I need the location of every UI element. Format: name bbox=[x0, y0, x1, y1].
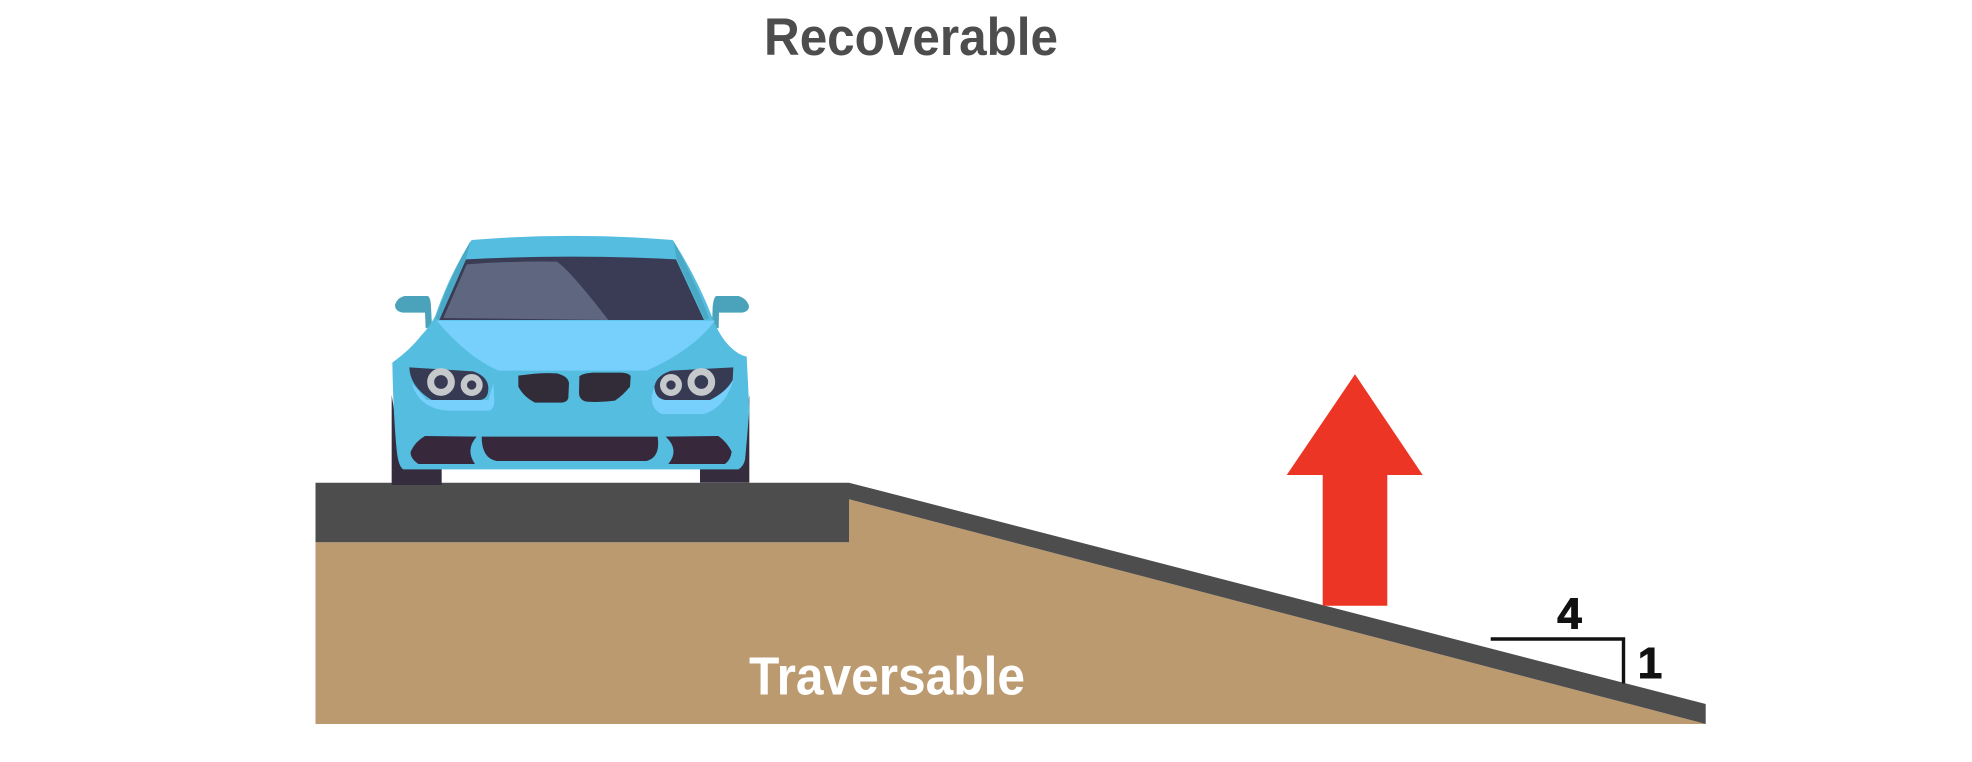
left headlight glow bbox=[412, 383, 494, 411]
heading: Recoverable: Recoverable bbox=[764, 8, 1058, 67]
right headlight glow bbox=[652, 380, 733, 414]
right wheel bbox=[700, 395, 749, 483]
left windshield pillar bbox=[435, 241, 471, 320]
center air intake bbox=[482, 437, 658, 461]
ratio label: 1: 1 bbox=[1638, 639, 1662, 688]
right grille bbox=[579, 373, 631, 402]
left wheel bbox=[392, 395, 442, 485]
slope ratio triangle lines bbox=[1491, 639, 1624, 684]
right headlight bbox=[654, 367, 733, 400]
ratio label: 4: 4 bbox=[1557, 590, 1582, 638]
left mirror bbox=[395, 296, 432, 328]
headlight rings bbox=[431, 372, 712, 393]
icon: blue car front view bbox=[392, 236, 749, 485]
left grille bbox=[518, 373, 569, 403]
arrow: red up arrow bbox=[1287, 374, 1423, 606]
soil embankment bbox=[316, 499, 1706, 724]
right windshield pillar bbox=[673, 241, 709, 320]
road surface and slope bbox=[316, 483, 1706, 724]
left air intake bbox=[411, 436, 477, 464]
car body bbox=[392, 236, 749, 469]
windshield bbox=[439, 257, 704, 320]
windshield reflection bbox=[443, 262, 608, 320]
hood bbox=[437, 321, 715, 371]
right mirror bbox=[712, 296, 749, 328]
right air intake bbox=[666, 436, 732, 464]
left headlight bbox=[409, 367, 488, 400]
label: Traversable: Traversable bbox=[749, 646, 1025, 706]
